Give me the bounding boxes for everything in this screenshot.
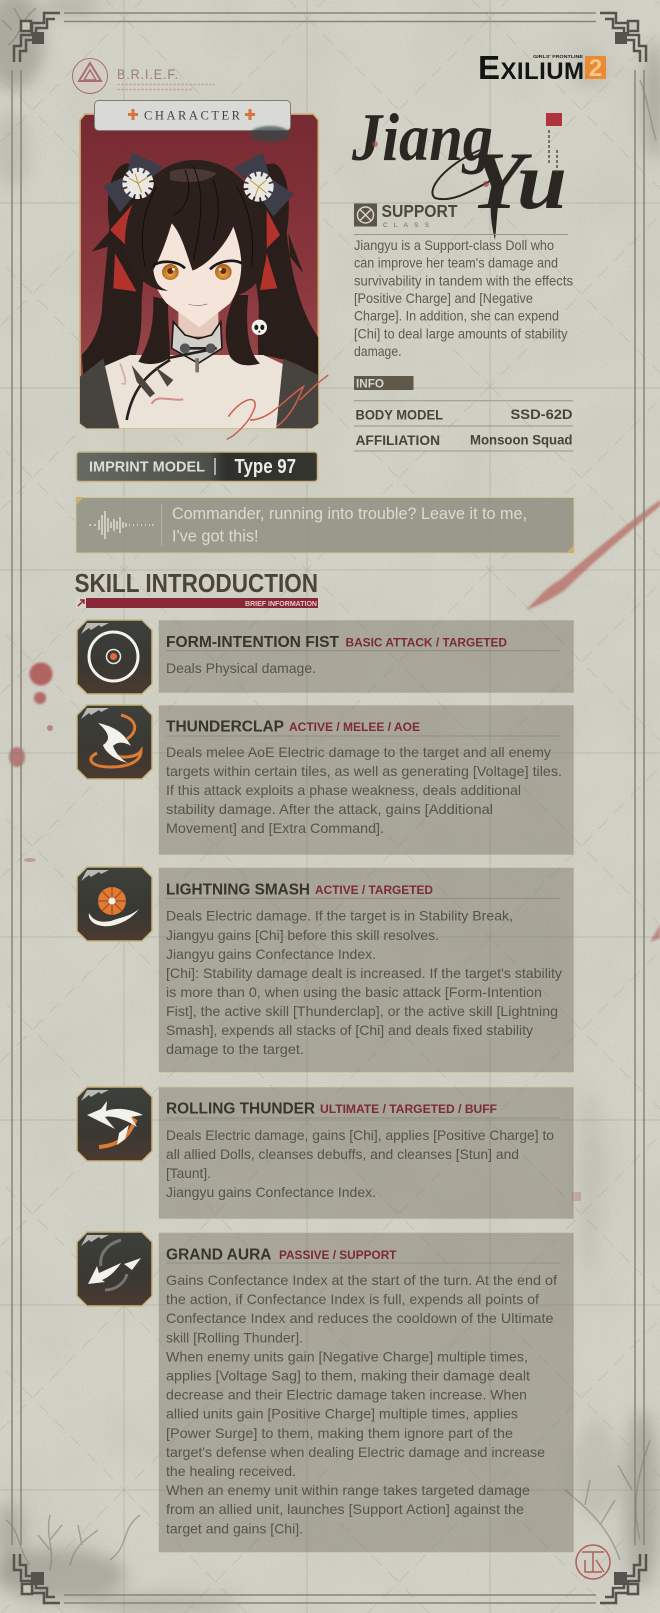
corner ornament: bottom right <box>600 1554 646 1603</box>
skill: grand aura: PASSIVE / SUPPORT <box>279 1248 397 1262</box>
panel: skill text <box>158 705 574 855</box>
icon: concentric target <box>77 620 152 694</box>
skill: rolling thunder: ROLLING THUNDER <box>166 1100 315 1118</box>
panel: skill text <box>158 620 574 693</box>
character description: damage. <box>354 343 402 359</box>
torso <box>103 355 292 430</box>
brush flourish <box>491 190 500 240</box>
skill: rolling thunder: [Taunt]. <box>166 1165 211 1181</box>
neck and collar <box>178 312 218 337</box>
skill: thunderclap: THUNDERCLAP <box>166 718 284 736</box>
skill: grand aura: [Power Surge] to them, making them ignore part of the <box>166 1425 513 1441</box>
bows <box>103 153 163 213</box>
voice quote: I've got this! <box>172 528 258 546</box>
hair cap and bangs <box>125 160 267 296</box>
skill: grand aura: Confectance Index and reduces the cooldown of the Ultimate <box>166 1310 554 1326</box>
skill: lightning smash: ACTIVE / TARGETED <box>315 883 433 897</box>
class: support <box>354 201 568 234</box>
skill: grand aura: When enemy units gain [Negative Charge] multiple times, <box>166 1348 528 1364</box>
skill: thunderclap: targets within certain tiles, as well as generating [Voltage] tiles. <box>166 763 562 779</box>
skill: grand aura <box>77 1232 574 1552</box>
red paint splatters <box>9 500 660 1201</box>
label: character: CHARACTER <box>144 108 241 122</box>
skill: thunderclap: Deals melee AoE Electric damage to the target and all enemy <box>166 744 551 760</box>
character description: can improve her team's damage and <box>354 255 558 271</box>
skill: lightning smash: LIGHTNING SMASH <box>166 882 310 898</box>
icon: gold corner left <box>76 497 84 505</box>
skill: grand aura: applies [Voltage Sag] to them, making their damage dealt <box>166 1368 530 1384</box>
character description <box>354 237 573 359</box>
class: support: SUPPORT <box>382 201 458 221</box>
skill: rolling thunder <box>77 1087 574 1219</box>
character description: Jiangyu is a Support-class Doll who <box>354 237 554 253</box>
label: character <box>94 100 290 142</box>
skill: thunderclap: If this attack exploits a phase weakness, deals additional <box>166 782 521 798</box>
red circular seal <box>576 1545 610 1579</box>
skill: grand aura: When an enemy unit within range takes targeted damage <box>166 1482 530 1498</box>
character portrait card <box>80 114 328 439</box>
corner ornament: bottom left <box>14 1554 60 1603</box>
skill: lightning smash: damage to the target. <box>166 1041 304 1057</box>
heading: skill introduction <box>74 568 318 608</box>
skill: form-intention fist: FORM-INTENTION FIST <box>166 634 339 651</box>
signature <box>227 375 328 439</box>
skill: grand aura: skill [Rolling Thunder]. <box>166 1329 303 1345</box>
skill: form-intention fist <box>77 620 574 694</box>
skill: grand aura: target's defense when dealing Electric damage and increase <box>166 1444 545 1460</box>
skill: grand aura: target and gains [Chi]. <box>166 1520 303 1536</box>
hair: twin tails <box>82 163 147 377</box>
character description: Charge]. In addition, she can expend <box>354 308 559 324</box>
skill: lightning smash <box>77 867 574 1072</box>
mouth <box>188 304 207 305</box>
info table: Monsoon Squad <box>470 432 572 448</box>
info table: BODY MODEL <box>356 406 443 422</box>
character description: [Chi] to deal large amounts of stability <box>354 325 568 341</box>
skill: grand aura: the action, if Confectance Index is full, expends all points of <box>166 1291 539 1307</box>
skill: rolling thunder: ULTIMATE / TARGETED / BUFF <box>320 1102 497 1116</box>
skill: grand aura: allied units gain [Positive Charge] multiple times, applies <box>166 1406 518 1422</box>
red label bar <box>76 598 318 608</box>
skill: grand aura: the healing received. <box>166 1463 296 1479</box>
name calligraphy: Jiang <box>351 99 493 175</box>
skill: form-intention fist: BASIC ATTACK / TARGETED <box>346 636 507 650</box>
voice quote <box>76 497 574 553</box>
side hair locks <box>138 297 170 364</box>
skill: grand aura: from an allied unit, launches [Support Action] against the <box>166 1501 524 1517</box>
brief logo: B.R.I.E.F. <box>117 67 179 82</box>
skill: grand aura: Gains Confectance Index at the start of the turn. At the end of <box>166 1272 557 1288</box>
panel: skill text <box>158 868 574 1072</box>
skill: thunderclap: Movement] and [Extra Command]. <box>166 820 384 836</box>
panda charm <box>252 320 267 335</box>
skill: lightning smash: is more than 0, when using the basic attack [Form-Intention <box>166 984 542 1000</box>
skill: thunderclap: stability damage. After the attack, gains [Additional <box>166 801 493 817</box>
skill: lightning smash: Smash], expends all stacks of [Chi] and deals fixed stability <box>166 1022 533 1038</box>
voice quote: Commander, running into trouble? Leave it to me, <box>172 505 527 523</box>
imprint model bar: Type 97 <box>234 456 296 478</box>
eyes <box>153 261 242 280</box>
skill: lightning smash: [Chi]: Stability damage dealt is increased. If the target's stability <box>166 965 562 981</box>
info tag <box>354 376 414 390</box>
heading: skill introduction: SKILL INTRODUCTION <box>74 568 318 598</box>
icon: orange 2 badge: 2 <box>589 55 602 82</box>
info table: AFFILIATION <box>356 432 440 448</box>
imprint model bar <box>76 452 318 482</box>
flowers <box>125 171 271 199</box>
skill: grand aura: decrease and their Electric damage taken increase. When <box>166 1387 527 1403</box>
chest accents <box>152 398 183 404</box>
icon: grand aura arrow <box>77 1232 152 1306</box>
skill: thunderclap <box>77 705 574 855</box>
icon: support class <box>354 204 377 226</box>
icon: orange cross left <box>128 109 138 120</box>
imprint model bar: IMPRINT MODEL <box>89 458 205 476</box>
character description: survivability in tandem with the effects <box>354 272 573 288</box>
corner ornament: top right <box>600 13 646 62</box>
corner ornament: top left <box>14 13 60 62</box>
skill: form-intention fist: Deals Physical damage. <box>166 660 316 676</box>
skill: rolling thunder: all allied Dolls, cleanses debuffs, and cleanses [Stun] and <box>166 1146 519 1162</box>
face <box>153 224 242 328</box>
class: support: CLASS <box>383 222 430 229</box>
panel: skill text <box>158 1087 574 1219</box>
info table <box>354 376 573 451</box>
icon: gold corner right <box>566 545 574 553</box>
icon: orange cross right <box>245 109 255 120</box>
game logo: EXILIUM <box>478 49 584 86</box>
game logo: GIRLS' FRONTLINE <box>533 54 583 59</box>
brief logo <box>72 58 215 94</box>
skill: lightning smash: Jiangyu gains Confectance Index. <box>166 946 376 962</box>
info tag: INFO <box>356 378 384 390</box>
character description: [Positive Charge] and [Negative <box>354 290 533 306</box>
name calligraphy: Yu <box>470 135 567 226</box>
icon: voice waveform <box>89 511 154 539</box>
skill: lightning smash: Fist], the active skill [Thunderclap], or the active skill [Lightning <box>166 1003 558 1019</box>
ribbons <box>110 203 137 292</box>
icon: rolling thunder bolts <box>77 1087 152 1161</box>
icon: thunderclap swirl <box>77 705 152 779</box>
skill: lightning smash: Jiangyu gains [Chi] before this skill resolves. <box>166 927 439 943</box>
vertical inscription <box>549 130 557 172</box>
icon: orange flower with swoosh <box>77 867 152 941</box>
info table: SSD-62D <box>510 406 572 422</box>
panel: skill text <box>158 1232 574 1552</box>
icon: brief emblem <box>72 58 108 94</box>
skill: rolling thunder: Deals Electric damage, gains [Chi], applies [Positive Charge] to <box>166 1127 554 1143</box>
skill: rolling thunder: Jiangyu gains Confectance Index. <box>166 1184 376 1200</box>
skill: thunderclap: ACTIVE / MELEE / AOE <box>289 720 420 734</box>
red label bar: BRIEF INFORMATION <box>245 601 317 608</box>
red seal <box>546 113 562 126</box>
name calligraphy <box>351 99 567 240</box>
skill: lightning smash: Deals Electric damage. If the target is in Stability Break, <box>166 908 513 924</box>
skill: grand aura: GRAND AURA <box>166 1246 272 1264</box>
